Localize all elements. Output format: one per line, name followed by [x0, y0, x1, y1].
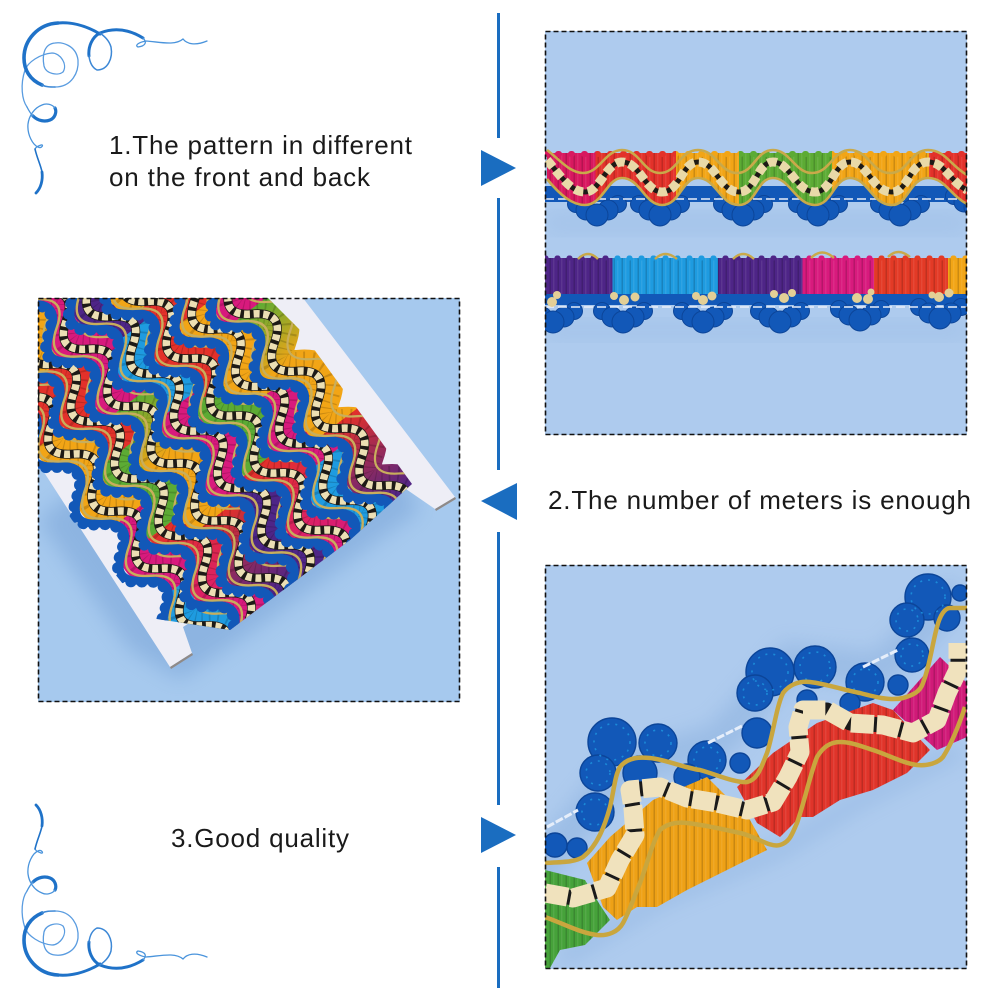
gold cord: lower [545, 707, 965, 935]
panel border: trim on card photo [38, 298, 460, 702]
vertical divider with arrow gaps [497, 13, 500, 988]
icon: top-left flourish [22, 23, 207, 193]
arrow: to left photo [481, 483, 517, 520]
text block: feature 1 [109, 130, 413, 192]
icon: bottom-left flourish [22, 805, 207, 975]
text block: feature 1: 1.The pattern in different [109, 130, 413, 160]
bead chain [545, 643, 958, 898]
panel border: close-up photo [546, 566, 966, 968]
arrow: to bottom photo [481, 817, 516, 853]
chenille colour blocks [545, 657, 967, 968]
card: white backing [38, 298, 456, 669]
blue crochet edge [543, 574, 968, 858]
trim strip: back [524, 252, 970, 333]
text block: feature 3: 3.Good quality [171, 823, 349, 853]
text block: feature 1: on the front and back [109, 162, 371, 192]
trim strip: front [545, 150, 1000, 226]
panel: close-up photo [530, 565, 968, 969]
arrow: to top photo [481, 150, 516, 186]
white thread [547, 650, 898, 827]
text block: feature 2: 2.The number of meters is enough [548, 485, 971, 515]
gold cord: upper [545, 608, 967, 863]
panel: trim wound on card photo [38, 298, 460, 702]
trim: wrapped strips [38, 298, 412, 630]
panel: front and back photo [545, 31, 967, 435]
panel border: front and back photo [546, 32, 966, 434]
